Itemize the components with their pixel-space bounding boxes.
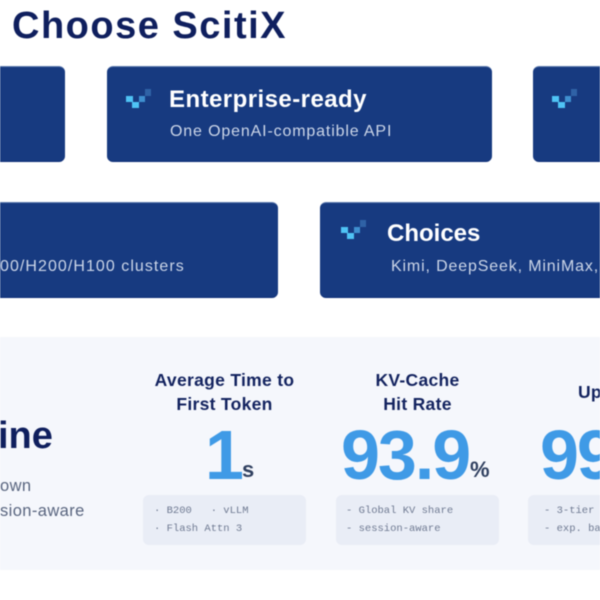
- text: engine description: [0, 477, 85, 520]
- note box: uptime: [528, 495, 600, 545]
- note text: · B200 · vLLM: [154, 505, 249, 517]
- note text: [544, 505, 600, 535]
- metric label: Hit Rate: [383, 394, 452, 414]
- metric unit: s: [242, 457, 254, 482]
- text: engine description: sion-aware: [0, 502, 85, 520]
- panel: clusters card: [0, 202, 278, 298]
- panel: enterprise-ready card: [107, 66, 492, 162]
- note text: - 3-tier: [544, 505, 594, 517]
- metric label: [154, 370, 294, 414]
- panel: choices card: [320, 202, 600, 298]
- metric label: [375, 370, 460, 414]
- card text: Kimi, DeepSeek, MiniMax,: [391, 258, 599, 275]
- card heading: Enterprise-ready: [169, 86, 367, 113]
- icon: pixel check: [125, 88, 152, 109]
- panel: card cut off at left: [0, 66, 65, 162]
- panel: card cut off at right: [533, 66, 600, 162]
- metric unit: %: [470, 457, 490, 482]
- card text: One OpenAI-compatible API: [170, 123, 392, 140]
- note text: [154, 505, 249, 535]
- metric value: 1: [205, 416, 242, 494]
- note box: KV-cache: [336, 495, 499, 545]
- note text: - session-aware: [346, 523, 441, 535]
- icon: pixel check: [340, 220, 366, 240]
- note text: · Flash Attn 3: [154, 523, 242, 535]
- metric label: Average Time to: [155, 370, 294, 390]
- title: Choose ScitiX: [12, 5, 287, 47]
- card heading: Choices: [387, 220, 480, 247]
- metric value: 93.9: [341, 416, 469, 494]
- note text: - Global KV share: [346, 505, 453, 517]
- note text: - exp. ba: [544, 523, 600, 535]
- card text: 00/H200/H100 clusters: [0, 258, 185, 275]
- metric label: First Token: [176, 394, 273, 414]
- metric: KV-cache hit rate: [341, 370, 490, 494]
- note box: time to first token: [143, 495, 306, 545]
- note text: [346, 504, 453, 535]
- metric label: KV-Cache: [375, 370, 460, 390]
- metric: time to first token: [154, 370, 294, 494]
- metric: uptime: [540, 382, 600, 494]
- icon: pixel check: [551, 88, 578, 109]
- text: engine description: own: [0, 477, 31, 495]
- panel: metrics background: [0, 337, 600, 570]
